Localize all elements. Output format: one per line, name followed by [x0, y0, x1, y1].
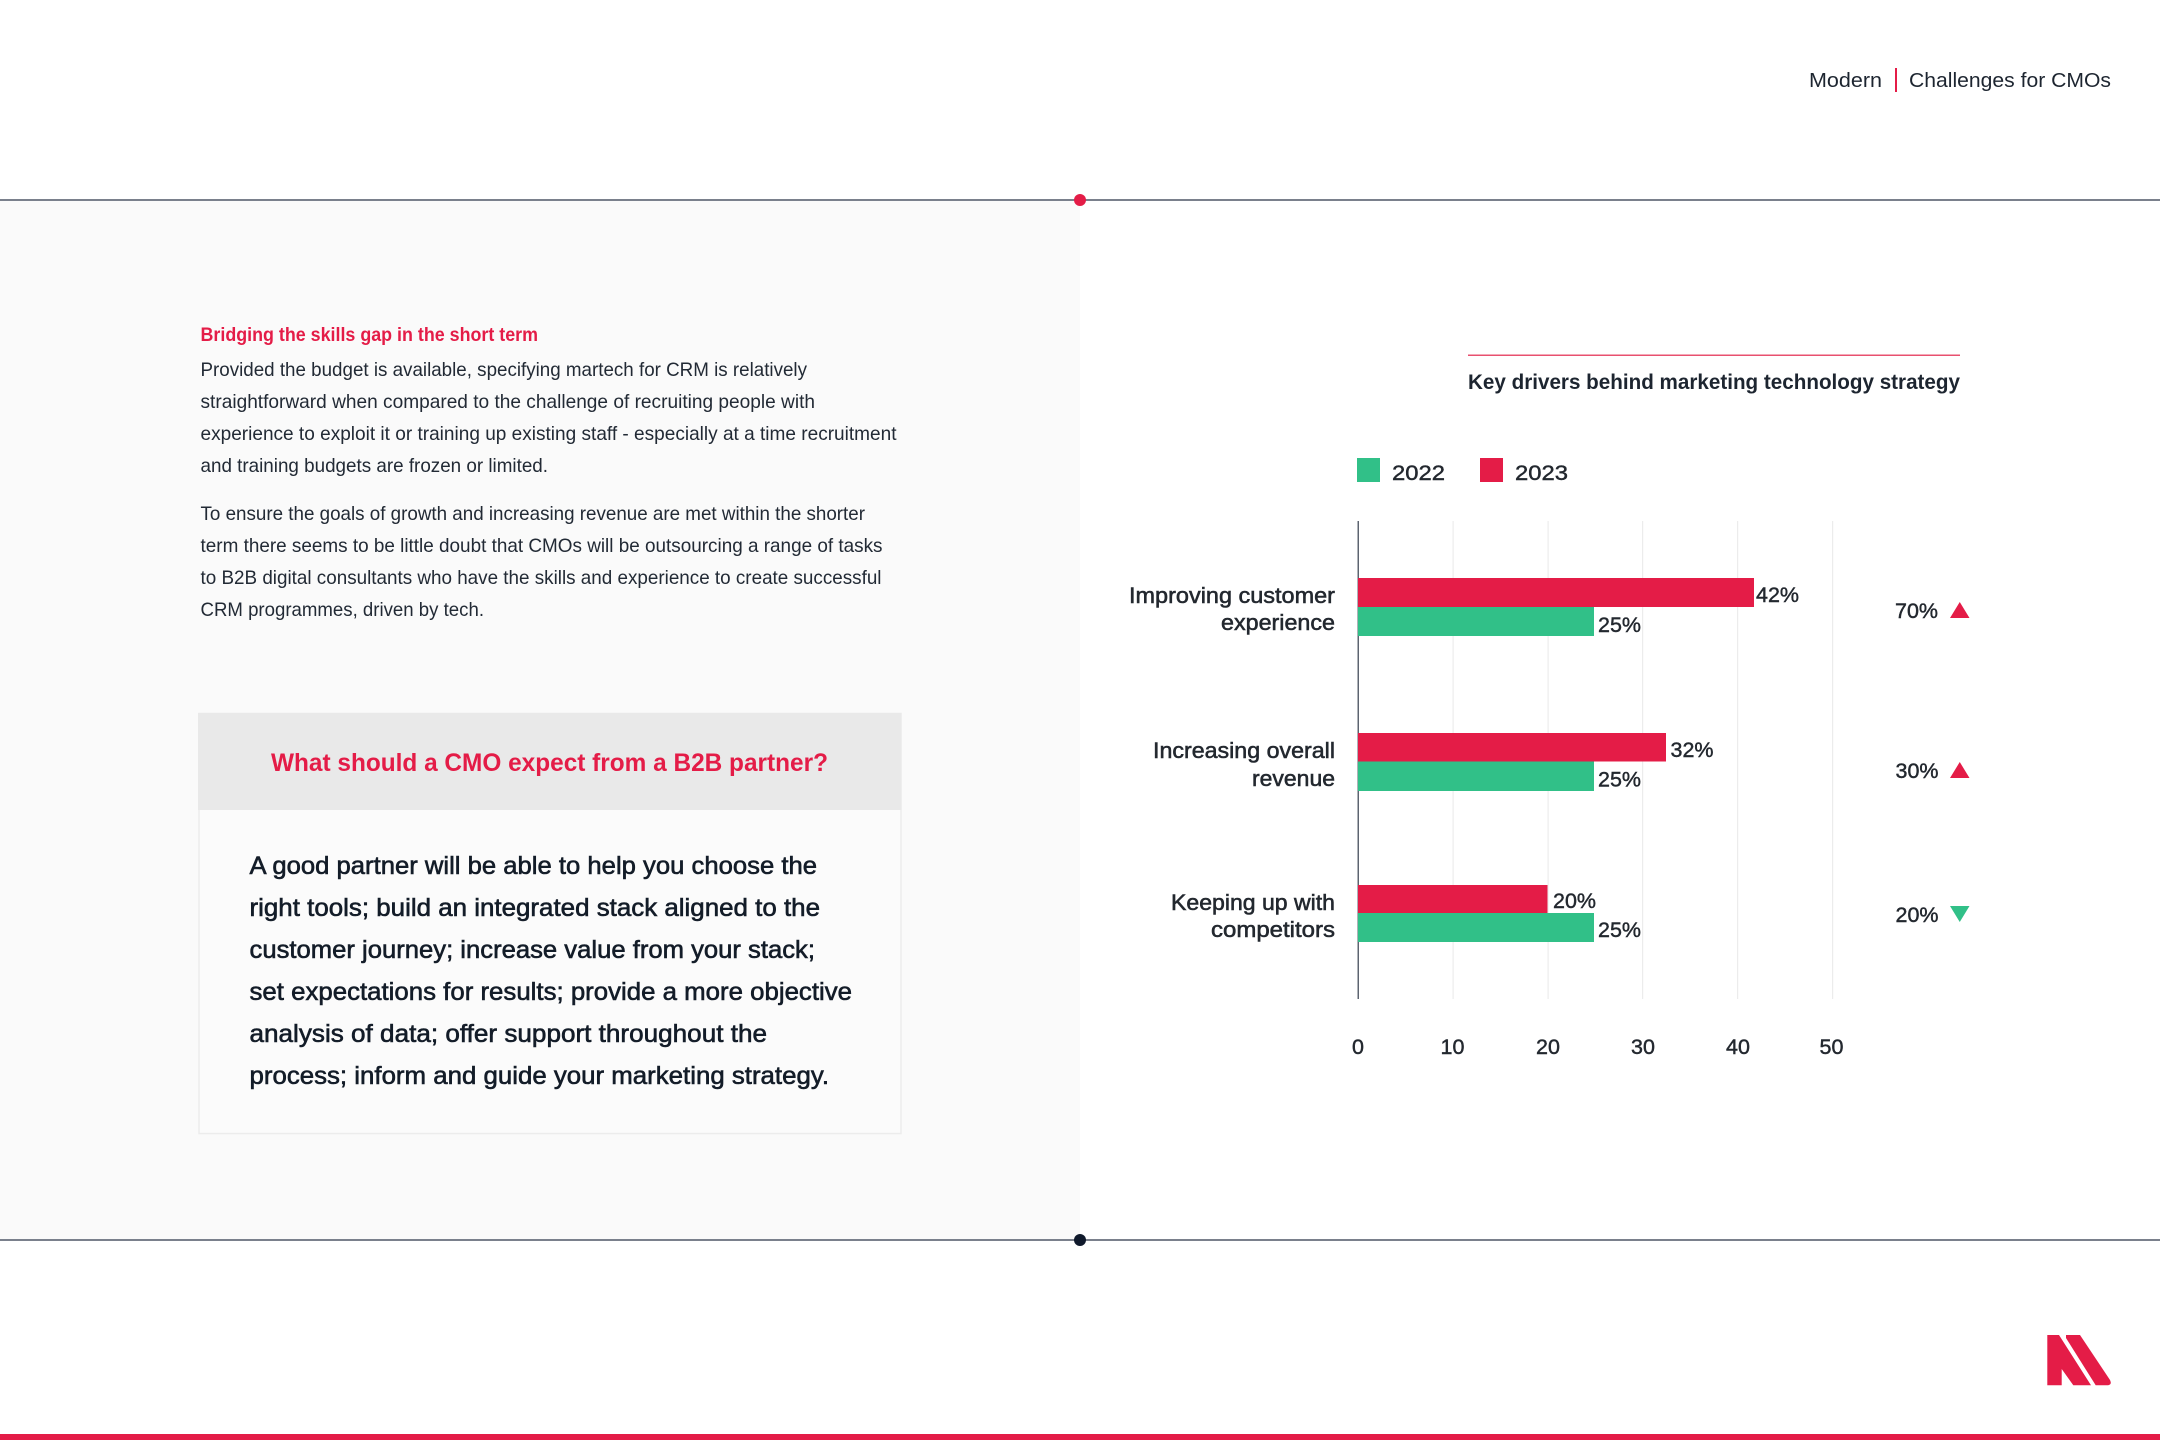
- change indicator: 30% up: 30%: [1896, 759, 1938, 783]
- group: keeping up with competitors: [1171, 885, 1641, 942]
- group: improving customer experience: 42%: [1756, 583, 1799, 607]
- paragraph 1: [200, 359, 897, 477]
- x axis labels: 40: [1726, 1035, 1750, 1059]
- chart legend: 2022: [1392, 461, 1445, 485]
- group: improving customer experience: Improving customer: [1129, 583, 1335, 608]
- page header: Challenges for CMOs: [1909, 69, 2111, 92]
- paragraph 1: and training budgets are frozen or limited.: [200, 455, 548, 477]
- group: increasing overall revenue: 25%: [1598, 768, 1641, 792]
- paragraph 2: to B2B digital consultants who have the skills and experience to create successful: [200, 567, 882, 589]
- panel text: analysis of data; offer support throughout the: [250, 1020, 767, 1048]
- change indicator: 30% up: [1896, 759, 1970, 783]
- chart legend: 2023: [1515, 461, 1568, 485]
- x axis labels: 30: [1631, 1035, 1655, 1059]
- paragraph 1: experience to exploit it or training up existing staff - especially at a time recruitment: [200, 423, 897, 445]
- page header: [1809, 68, 2111, 92]
- group: improving customer experience: experience: [1221, 610, 1335, 635]
- group: improving customer experience: [1129, 578, 1799, 637]
- paragraph 1: straightforward when compared to the challenge of recruiting people with: [200, 391, 815, 413]
- paragraph 2: [200, 503, 883, 621]
- paragraph 2: term there seems to be little doubt that CMOs will be outsourcing a range of tasks: [200, 535, 883, 557]
- panel text: right tools; build an integrated stack aligned to the: [250, 894, 820, 922]
- paragraph 1: Provided the budget is available, specifying martech for CRM is relatively: [200, 359, 807, 381]
- paragraph 2: CRM programmes, driven by tech.: [200, 599, 484, 621]
- x axis labels: 50: [1820, 1035, 1843, 1059]
- panel body: [199, 714, 901, 1134]
- panel text: [250, 852, 852, 1090]
- change indicator: 70% up: 70%: [1895, 599, 1938, 623]
- group: keeping up with competitors: competitors: [1211, 917, 1335, 942]
- group: increasing overall revenue: [1153, 733, 1714, 792]
- group: improving customer experience: 25%: [1598, 613, 1641, 637]
- panel: what should a CMO expect: [198, 713, 902, 1134]
- group: increasing overall revenue: Increasing overall: [1153, 738, 1335, 763]
- x axis labels: [1352, 1035, 1843, 1059]
- panel text: customer journey; increase value from your stack;: [250, 936, 815, 964]
- top divider line with red dot: [0, 194, 2160, 206]
- group: keeping up with competitors: 20%: [1553, 889, 1596, 913]
- icon: logo: [2047, 1335, 2111, 1385]
- text block: bridging the skills gap: [200, 325, 897, 621]
- bar chart: [1129, 521, 1843, 1059]
- page header: Modern: [1809, 69, 1882, 92]
- group: keeping up with competitors: Keeping up with: [1171, 890, 1335, 915]
- chart title: Key drivers behind marketing technology strategy: [1468, 370, 1960, 394]
- chart legend: [1357, 458, 1568, 485]
- panel text: set expectations for results; provide a more objective: [250, 978, 852, 1006]
- bottom accent bar: [0, 1434, 2160, 1440]
- change indicator: 70% up: [1895, 599, 1970, 623]
- paragraph 2: To ensure the goals of growth and increasing revenue are met within the shorter: [200, 503, 865, 525]
- panel heading: What should a CMO expect from a B2B partner?: [271, 749, 828, 777]
- x axis labels: 10: [1441, 1035, 1464, 1059]
- heading: bridging the skills gap: Bridging the skills gap in the short term: [200, 325, 538, 346]
- change indicator: 20% down: [1896, 903, 1970, 927]
- panel text: A good partner will be able to help you choose the: [250, 852, 817, 880]
- x axis labels: 20: [1536, 1035, 1560, 1059]
- panel text: process; inform and guide your marketing strategy.: [250, 1062, 829, 1090]
- left panel background: [0, 200, 1080, 1240]
- group: increasing overall revenue: 32%: [1670, 738, 1714, 762]
- group: keeping up with competitors: 25%: [1598, 918, 1641, 942]
- bottom divider line with dark dot: [0, 1234, 2160, 1246]
- x axis labels: 0: [1352, 1035, 1364, 1059]
- panel heading band: [198, 713, 902, 810]
- group: increasing overall revenue: revenue: [1252, 766, 1335, 791]
- change indicator: 20% down: 20%: [1896, 903, 1938, 927]
